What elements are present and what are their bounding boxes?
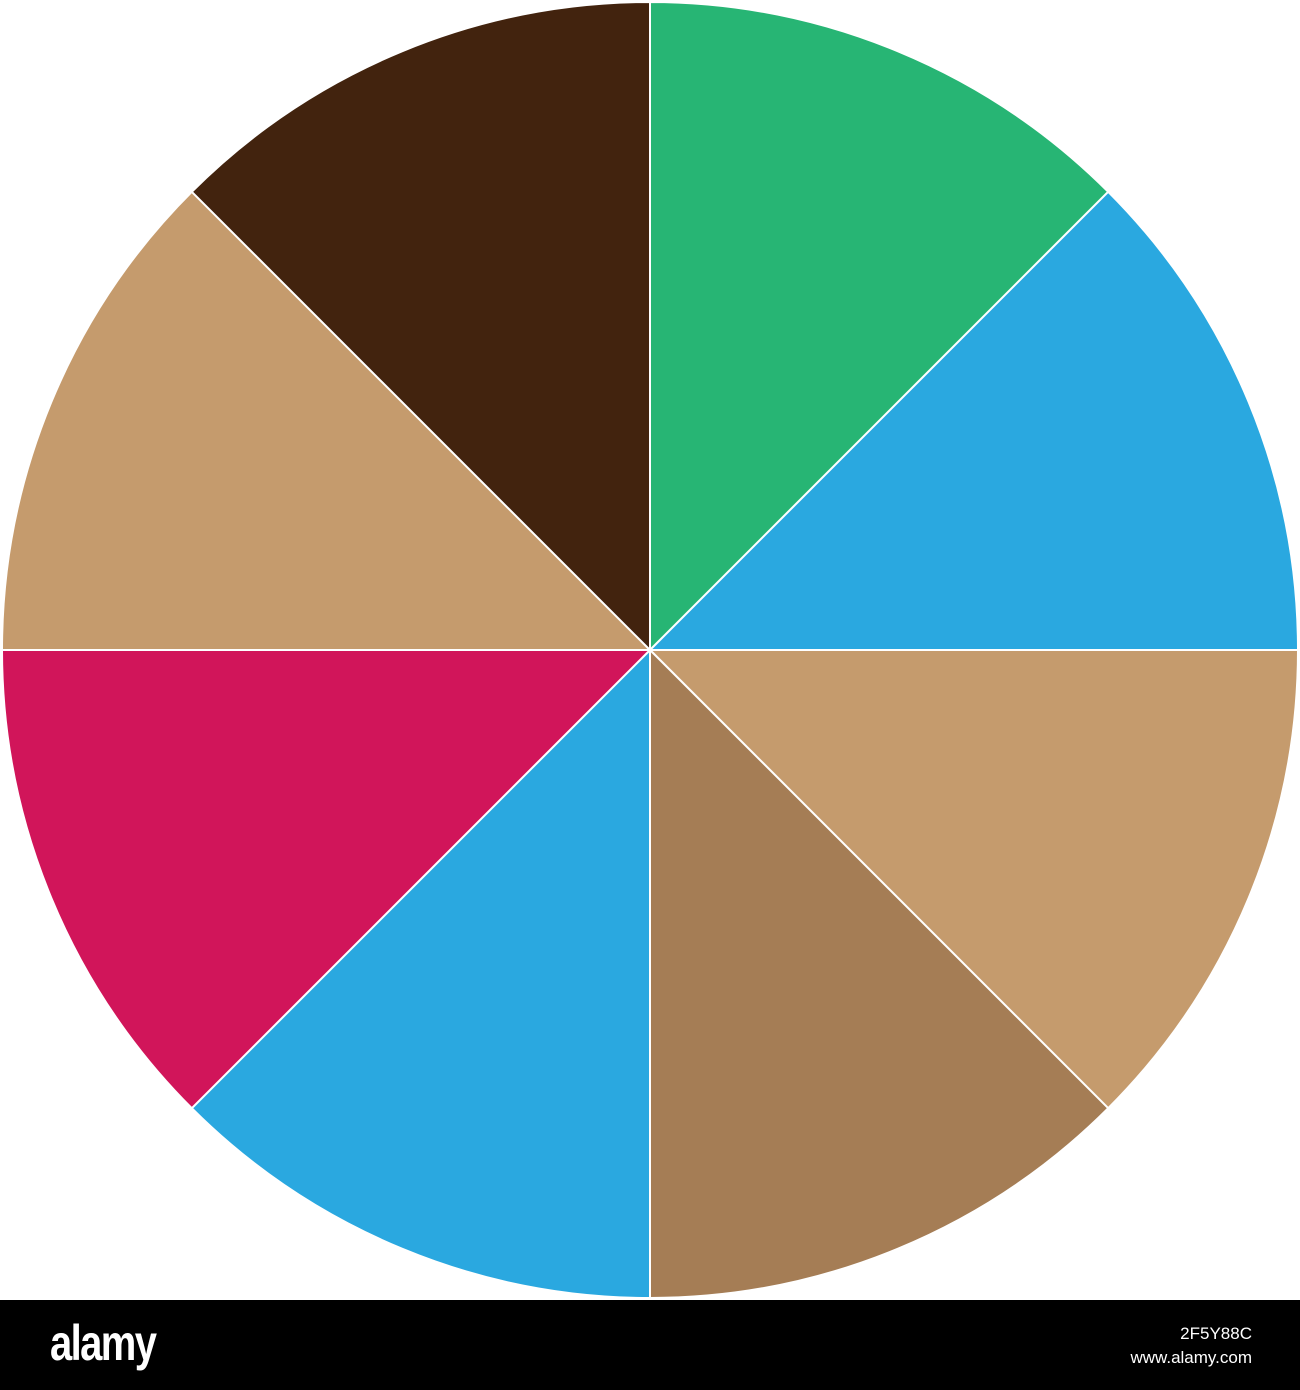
image id and url: 2F5Y88C (1180, 1324, 1252, 1343)
slice: crimson (2, 650, 650, 1108)
slice: tan lower right (650, 650, 1298, 1108)
slice: tan upper left (2, 192, 650, 650)
slice: dark brown (192, 2, 650, 650)
slice: brown (650, 650, 1108, 1298)
slice: green (650, 2, 1108, 650)
image id and url (1130, 1324, 1252, 1367)
logo text: alamy (50, 1315, 155, 1371)
footer bar (0, 1300, 1300, 1390)
image id and url: www.alamy.com (1130, 1348, 1252, 1367)
slice: blue lower left (192, 650, 650, 1298)
slice: blue upper right (650, 192, 1298, 650)
